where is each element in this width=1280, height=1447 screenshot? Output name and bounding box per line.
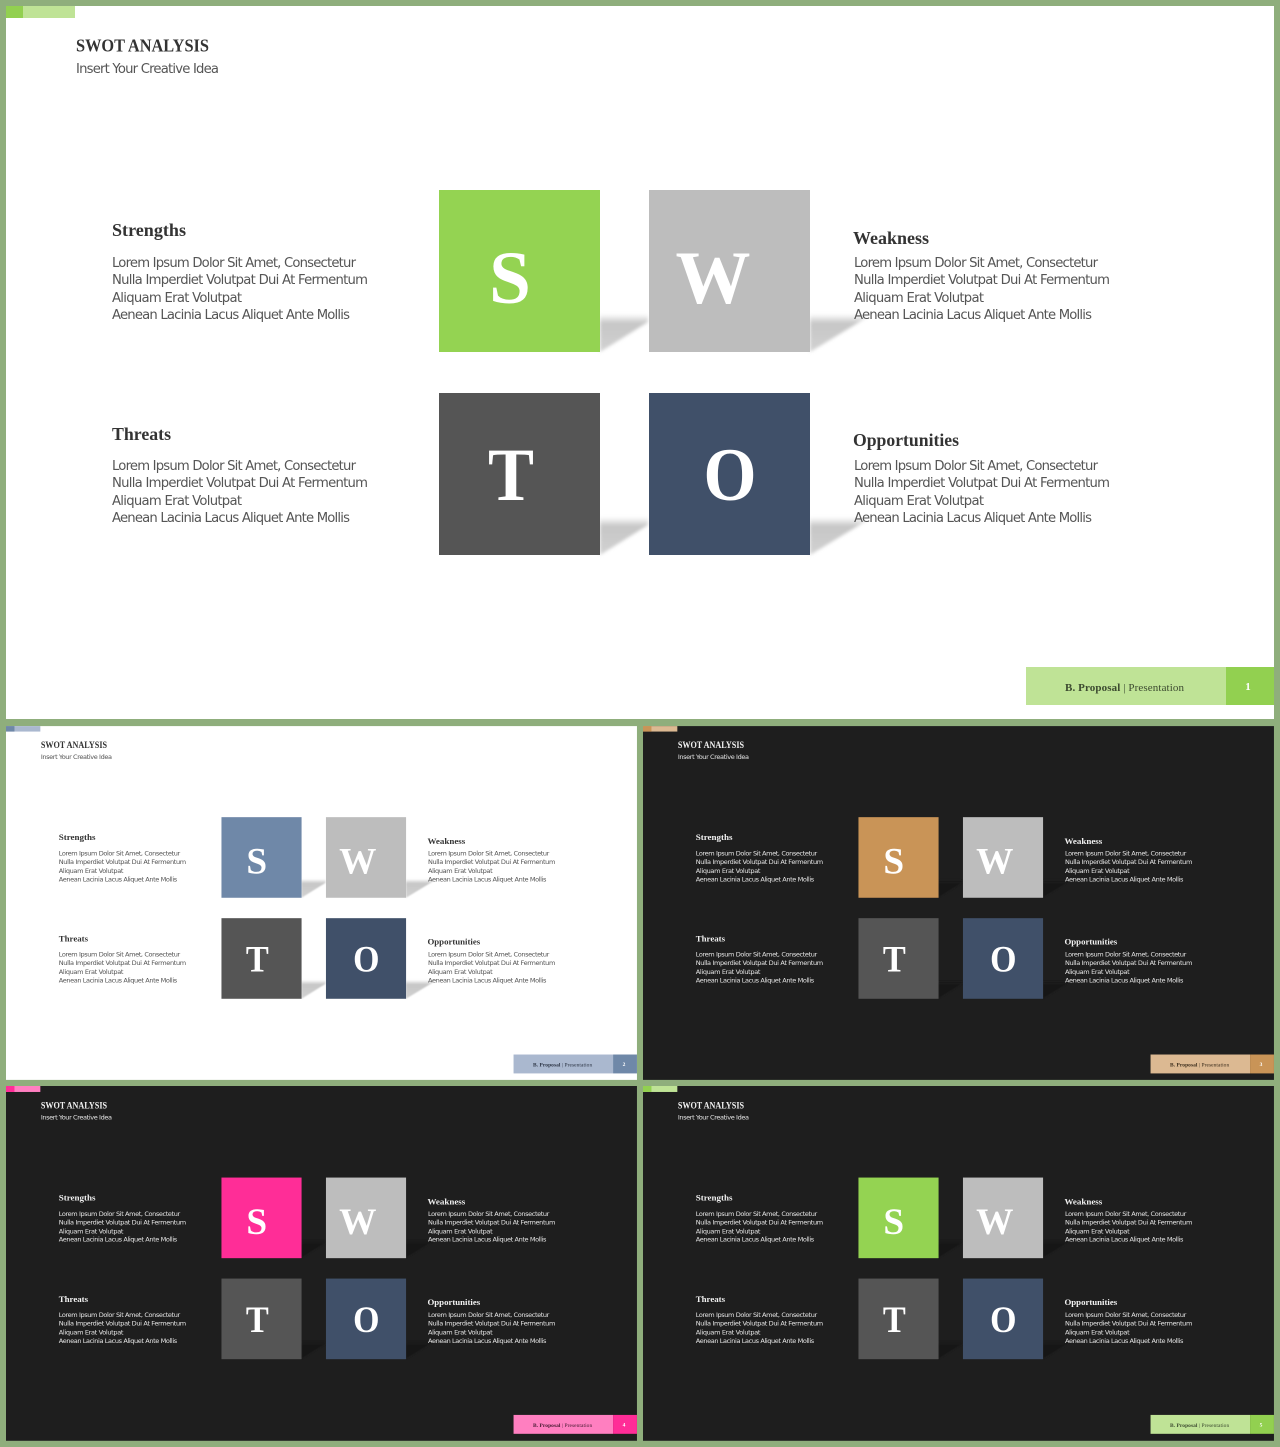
square S	[221, 817, 302, 898]
shadows	[939, 879, 1071, 999]
square W	[326, 1178, 406, 1258]
text: threats: Lorem Ipsum Dolor Sit Amet, Consectetur	[696, 950, 817, 958]
square T: T	[246, 939, 269, 980]
text: threats: Aliquam Erat Volutpat	[696, 1328, 761, 1336]
square O: O	[353, 1300, 379, 1341]
text: opportunities: Opportunities	[1064, 937, 1118, 947]
slide 1: large light green SWOT	[6, 6, 1274, 719]
corner tab	[6, 1086, 40, 1092]
footer bar: B. Proposal | Presentation	[1170, 1062, 1229, 1068]
text: threats: Aenean Lacinia Lacus Aliquet Ante Mollis	[59, 976, 178, 984]
square S: S	[489, 237, 531, 320]
text: weakness: Aenean Lacinia Lacus Aliquet Ante Mollis	[854, 308, 1092, 323]
text: weakness: Lorem Ipsum Dolor Sit Amet, Consectetur	[428, 849, 550, 857]
shadows	[939, 1239, 1071, 1359]
square S	[858, 817, 939, 898]
text: opportunities: Aenean Lacinia Lacus Aliquet Ante Mollis	[854, 511, 1092, 526]
text: threats: Lorem Ipsum Dolor Sit Amet, Consectetur	[59, 1311, 180, 1319]
heading: Insert Your Creative Idea	[41, 753, 112, 761]
square S: S	[246, 841, 267, 882]
text: threats: Aenean Lacinia Lacus Aliquet Ante Mollis	[112, 511, 350, 526]
heading	[678, 1101, 749, 1121]
slide 5: small dark green SWOT	[643, 1086, 1274, 1441]
text: strengths: Lorem Ipsum Dolor Sit Amet, Consectetur	[696, 849, 817, 857]
text: strengths: Nulla Imperdiet Volutpat Dui At Fermentum	[59, 1218, 186, 1226]
text: opportunities: Aliquam Erat Volutpat	[428, 968, 493, 976]
square O	[649, 393, 810, 555]
text: weakness: Aenean Lacinia Lacus Aliquet Ante Mollis	[1065, 875, 1184, 883]
heading: SWOT ANALYSIS	[41, 1101, 107, 1111]
text: strengths: Strengths	[59, 832, 96, 842]
square S: S	[883, 1202, 904, 1243]
text: opportunities: Nulla Imperdiet Volutpat Dui At Fermentum	[428, 1319, 555, 1327]
square O: O	[990, 939, 1016, 980]
footer bar: 3	[1260, 1062, 1263, 1068]
footer bar	[1026, 667, 1274, 705]
text: weakness: Nulla Imperdiet Volutpat Dui At Fermentum	[428, 858, 555, 866]
shadows	[302, 879, 434, 999]
text: weakness: Aliquam Erat Volutpat	[854, 291, 984, 306]
footer bar: B. Proposal | Presentation	[1065, 682, 1184, 694]
text: threats: Aenean Lacinia Lacus Aliquet Ante Mollis	[696, 976, 815, 984]
square T	[221, 918, 302, 999]
corner tab	[6, 6, 75, 18]
text: opportunities	[427, 937, 555, 984]
heading: Insert Your Creative Idea	[678, 1113, 749, 1121]
text: weakness: Weakness	[853, 228, 929, 248]
text: strengths: Nulla Imperdiet Volutpat Dui At Fermentum	[696, 858, 823, 866]
footer bar: B. Proposal | Presentation	[1170, 1423, 1229, 1429]
heading: SWOT ANALYSIS	[76, 36, 209, 56]
text: strengths: Lorem Ipsum Dolor Sit Amet, Consectetur	[59, 849, 180, 857]
text: opportunities: Lorem Ipsum Dolor Sit Amet, Consectetur	[1065, 950, 1187, 958]
square T	[221, 1279, 302, 1359]
text: weakness	[427, 836, 555, 883]
slide 3: small dark orange SWOT	[643, 726, 1274, 1080]
text: opportunities: Nulla Imperdiet Volutpat Dui At Fermentum	[1065, 1319, 1192, 1327]
text: weakness: Nulla Imperdiet Volutpat Dui At Fermentum	[854, 273, 1110, 288]
text: threats: Aliquam Erat Volutpat	[112, 494, 242, 509]
text: opportunities: Opportunities	[427, 1297, 481, 1307]
square O: O	[990, 1300, 1016, 1341]
text: weakness: Weakness	[1064, 1196, 1103, 1206]
text: weakness: Aliquam Erat Volutpat	[428, 867, 493, 875]
text: strengths: Aenean Lacinia Lacus Aliquet Ante Mollis	[112, 308, 350, 323]
text: weakness	[853, 228, 1110, 323]
text: opportunities	[427, 1297, 555, 1345]
text: strengths: Nulla Imperdiet Volutpat Dui At Fermentum	[59, 858, 186, 866]
heading	[678, 740, 749, 761]
text: threats: Lorem Ipsum Dolor Sit Amet, Consectetur	[59, 950, 180, 958]
text: opportunities: Nulla Imperdiet Volutpat Dui At Fermentum	[428, 959, 555, 967]
text: threats: Threats	[696, 934, 726, 944]
square O	[963, 1279, 1043, 1359]
text: threats	[696, 934, 823, 984]
square T: T	[883, 1300, 906, 1341]
text: threats: Threats	[59, 1294, 89, 1304]
text: threats: Aenean Lacinia Lacus Aliquet Ante Mollis	[696, 1337, 815, 1345]
text: strengths: Strengths	[696, 1192, 733, 1202]
square T: T	[246, 1300, 269, 1341]
square W: W	[339, 841, 376, 882]
square T: T	[488, 434, 534, 517]
slide 2: small light blue SWOT	[6, 726, 637, 1080]
footer bar	[1151, 1055, 1274, 1073]
square O: O	[704, 434, 756, 517]
text: strengths: Strengths	[696, 832, 733, 842]
text: opportunities: Lorem Ipsum Dolor Sit Amet, Consectetur	[854, 459, 1099, 474]
text: strengths: Aliquam Erat Volutpat	[112, 291, 242, 306]
text: weakness: Lorem Ipsum Dolor Sit Amet, Consectetur	[1065, 1210, 1187, 1218]
text: strengths: Strengths	[112, 220, 186, 240]
text: threats: Nulla Imperdiet Volutpat Dui At Fermentum	[696, 959, 823, 967]
text: opportunities	[1064, 937, 1192, 984]
text: threats: Threats	[59, 934, 89, 944]
slide 4: small dark pink SWOT	[6, 1086, 637, 1441]
square S	[439, 190, 600, 352]
text: weakness: Nulla Imperdiet Volutpat Dui At Fermentum	[1065, 858, 1192, 866]
text: strengths	[59, 832, 186, 883]
text: strengths: Aliquam Erat Volutpat	[696, 1227, 761, 1235]
text: weakness: Aenean Lacinia Lacus Aliquet Ante Mollis	[1065, 1236, 1184, 1244]
square W: W	[976, 841, 1013, 882]
text: opportunities: Aenean Lacinia Lacus Aliquet Ante Mollis	[428, 976, 547, 984]
heading: Insert Your Creative Idea	[41, 1113, 112, 1121]
text: threats	[59, 1294, 186, 1345]
text: opportunities: Lorem Ipsum Dolor Sit Amet, Consectetur	[428, 1311, 550, 1319]
square W	[649, 190, 810, 352]
text: threats: Nulla Imperdiet Volutpat Dui At Fermentum	[59, 959, 186, 967]
text: opportunities	[853, 430, 1110, 526]
text: threats: Lorem Ipsum Dolor Sit Amet, Consectetur	[696, 1311, 817, 1319]
square S: S	[246, 1202, 267, 1243]
text: weakness: Weakness	[1064, 836, 1103, 846]
heading	[41, 1101, 112, 1121]
heading: SWOT ANALYSIS	[678, 740, 744, 750]
footer bar: 1	[1245, 681, 1251, 693]
text: opportunities: Lorem Ipsum Dolor Sit Amet, Consectetur	[428, 950, 550, 958]
text: opportunities: Nulla Imperdiet Volutpat Dui At Fermentum	[1065, 959, 1192, 967]
text: weakness	[1064, 836, 1192, 883]
text: weakness: Aliquam Erat Volutpat	[1065, 1227, 1130, 1235]
square O	[326, 918, 406, 999]
square T: T	[883, 939, 906, 980]
text: threats: Nulla Imperdiet Volutpat Dui At Fermentum	[112, 476, 368, 491]
text: weakness: Aliquam Erat Volutpat	[1065, 867, 1130, 875]
corner tab	[643, 726, 677, 732]
text: opportunities: Aliquam Erat Volutpat	[1065, 1328, 1130, 1336]
footer bar	[1151, 1415, 1274, 1434]
text: opportunities: Opportunities	[427, 937, 481, 947]
text: weakness: Aenean Lacinia Lacus Aliquet Ante Mollis	[428, 875, 547, 883]
text: threats: Threats	[696, 1294, 726, 1304]
text: opportunities: Lorem Ipsum Dolor Sit Amet, Consectetur	[1065, 1311, 1187, 1319]
text: strengths: Aliquam Erat Volutpat	[59, 1227, 124, 1235]
footer bar	[514, 1415, 637, 1434]
square T	[439, 393, 600, 555]
square T	[858, 918, 939, 999]
text: strengths	[59, 1192, 186, 1244]
footer bar	[514, 1055, 637, 1073]
text: opportunities: Aliquam Erat Volutpat	[428, 1328, 493, 1336]
text: strengths: Aliquam Erat Volutpat	[696, 867, 761, 875]
text: weakness: Weakness	[427, 1196, 466, 1206]
text: strengths: Aenean Lacinia Lacus Aliquet Ante Mollis	[696, 1236, 815, 1244]
text: weakness: Lorem Ipsum Dolor Sit Amet, Consectetur	[854, 256, 1099, 271]
text: strengths: Nulla Imperdiet Volutpat Dui At Fermentum	[696, 1218, 823, 1226]
text: threats: Lorem Ipsum Dolor Sit Amet, Consectetur	[112, 459, 357, 474]
square O	[326, 1279, 406, 1359]
text: opportunities: Aenean Lacinia Lacus Aliquet Ante Mollis	[1065, 976, 1184, 984]
heading: SWOT ANALYSIS	[678, 1101, 744, 1111]
heading	[41, 740, 112, 761]
text: strengths: Aenean Lacinia Lacus Aliquet Ante Mollis	[59, 875, 178, 883]
shadows	[600, 314, 866, 555]
text: strengths: Aenean Lacinia Lacus Aliquet Ante Mollis	[696, 875, 815, 883]
text: opportunities: Aenean Lacinia Lacus Aliquet Ante Mollis	[1065, 1337, 1184, 1345]
text: strengths: Lorem Ipsum Dolor Sit Amet, Consectetur	[696, 1210, 817, 1218]
square T	[858, 1279, 939, 1359]
text: threats: Aliquam Erat Volutpat	[59, 1328, 124, 1336]
square W: W	[976, 1202, 1013, 1243]
footer bar: B. Proposal | Presentation	[533, 1423, 592, 1429]
text: threats	[59, 934, 186, 984]
footer bar: 2	[623, 1062, 626, 1068]
text: opportunities: Nulla Imperdiet Volutpat Dui At Fermentum	[854, 476, 1110, 491]
text: weakness: Weakness	[427, 836, 466, 846]
footer bar: 5	[1260, 1422, 1263, 1428]
footer bar: B. Proposal | Presentation	[533, 1062, 592, 1068]
square O	[963, 918, 1043, 999]
text: strengths: Aenean Lacinia Lacus Aliquet Ante Mollis	[59, 1236, 178, 1244]
text: threats: Aliquam Erat Volutpat	[59, 968, 124, 976]
text: weakness: Nulla Imperdiet Volutpat Dui At Fermentum	[1065, 1218, 1192, 1226]
text: strengths: Nulla Imperdiet Volutpat Dui At Fermentum	[112, 273, 368, 288]
square W	[963, 817, 1043, 898]
heading	[76, 36, 219, 77]
text: threats	[696, 1294, 823, 1345]
text: weakness: Nulla Imperdiet Volutpat Dui At Fermentum	[428, 1218, 555, 1226]
corner tab	[6, 726, 40, 732]
text: weakness	[1064, 1196, 1192, 1244]
shadows	[302, 1239, 434, 1359]
text: opportunities: Opportunities	[1064, 1297, 1118, 1307]
text: strengths	[696, 832, 823, 883]
square W	[326, 817, 406, 898]
text: opportunities: Aliquam Erat Volutpat	[854, 494, 984, 509]
text: weakness: Aliquam Erat Volutpat	[428, 1227, 493, 1235]
square W: W	[676, 237, 750, 320]
square S	[221, 1178, 302, 1258]
heading: SWOT ANALYSIS	[41, 740, 107, 750]
text: opportunities: Aliquam Erat Volutpat	[1065, 968, 1130, 976]
text: strengths: Aliquam Erat Volutpat	[59, 867, 124, 875]
text: threats: Nulla Imperdiet Volutpat Dui At Fermentum	[696, 1319, 823, 1327]
square S	[858, 1178, 939, 1258]
square W: W	[339, 1202, 376, 1243]
text: opportunities	[1064, 1297, 1192, 1345]
text: opportunities: Opportunities	[853, 430, 959, 450]
text: strengths: Strengths	[59, 1192, 96, 1202]
corner tab	[643, 1086, 677, 1092]
square S: S	[883, 841, 904, 882]
text: threats: Aenean Lacinia Lacus Aliquet Ante Mollis	[59, 1337, 178, 1345]
text: strengths	[696, 1192, 823, 1244]
text: strengths: Lorem Ipsum Dolor Sit Amet, Consectetur	[112, 256, 357, 271]
text: weakness	[427, 1196, 555, 1244]
text: threats: Nulla Imperdiet Volutpat Dui At Fermentum	[59, 1319, 186, 1327]
text: weakness: Lorem Ipsum Dolor Sit Amet, Consectetur	[428, 1210, 550, 1218]
text: strengths	[112, 220, 368, 323]
footer bar: 4	[623, 1422, 626, 1428]
text: threats	[112, 424, 368, 526]
text: threats: Threats	[112, 424, 171, 444]
heading: Insert Your Creative Idea	[678, 753, 749, 761]
text: opportunities: Aenean Lacinia Lacus Aliquet Ante Mollis	[428, 1337, 547, 1345]
text: strengths: Lorem Ipsum Dolor Sit Amet, Consectetur	[59, 1210, 180, 1218]
square W	[963, 1178, 1043, 1258]
text: weakness: Lorem Ipsum Dolor Sit Amet, Consectetur	[1065, 849, 1187, 857]
text: weakness: Aenean Lacinia Lacus Aliquet Ante Mollis	[428, 1236, 547, 1244]
text: threats: Aliquam Erat Volutpat	[696, 968, 761, 976]
heading: Insert Your Creative Idea	[76, 62, 219, 77]
square O: O	[353, 939, 379, 980]
